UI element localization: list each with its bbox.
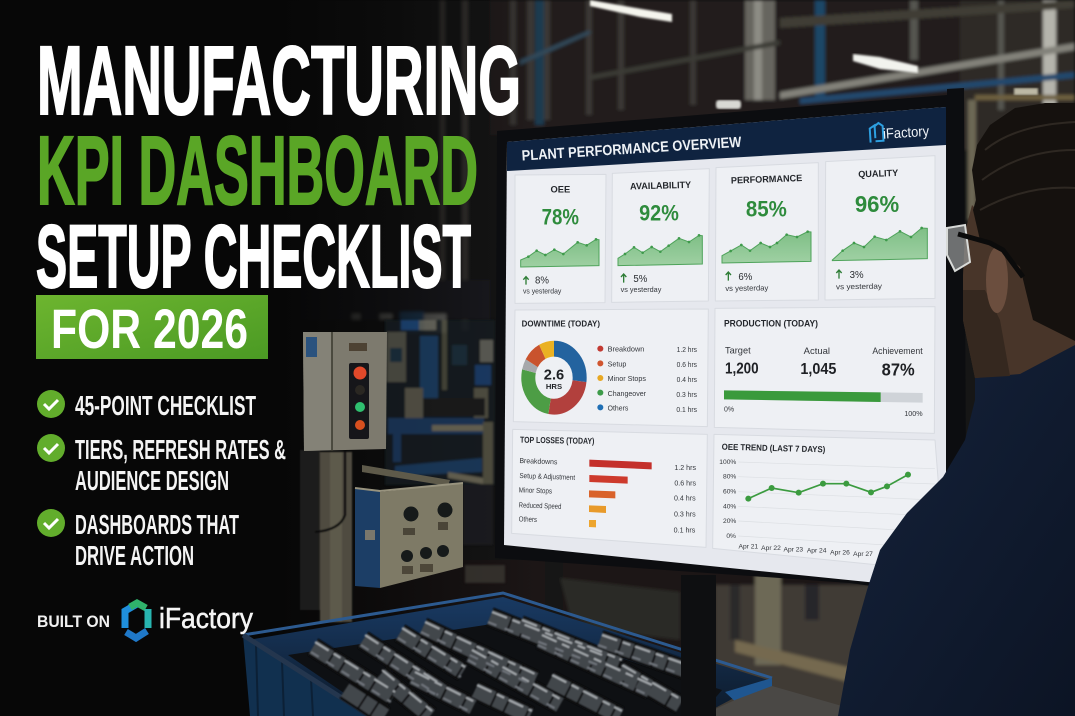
item: dashboards bbox=[37, 509, 239, 571]
loss rows: 0.1 hrs bbox=[674, 525, 696, 534]
card: performance: 6% bbox=[738, 272, 753, 283]
stack light: green bbox=[355, 402, 365, 412]
skin bbox=[963, 205, 1075, 378]
card: OEE: 78% bbox=[542, 204, 579, 229]
shirt bbox=[838, 342, 1075, 716]
card: OEE: 8% bbox=[535, 276, 549, 287]
panel: OEE trend: 100% bbox=[719, 459, 736, 466]
donut legend: 0.3 hrs bbox=[676, 390, 697, 399]
stack light: red bbox=[354, 366, 366, 380]
panel: production: Target bbox=[725, 346, 751, 356]
item: tiers bbox=[37, 434, 286, 496]
lower background racks bbox=[300, 280, 490, 320]
loss rows: Minor Stops bbox=[519, 485, 553, 496]
panel: downtime: 2.6 bbox=[544, 367, 564, 383]
screen header bbox=[507, 107, 946, 171]
item: tiers: AUDIENCE DESIGN bbox=[75, 465, 229, 496]
card: quality bbox=[825, 156, 935, 300]
stack light: orange bbox=[355, 420, 365, 430]
screen bbox=[504, 107, 946, 590]
icon: iFactory hexagon logo bbox=[125, 603, 148, 638]
card: performance: vs yesterday bbox=[725, 283, 769, 293]
loss rows: Others bbox=[519, 514, 538, 524]
crate of camshafts bbox=[243, 593, 842, 716]
panel: OEE trend: 0% bbox=[726, 533, 736, 540]
monitor stand bbox=[681, 575, 716, 716]
control pillar bbox=[300, 450, 352, 622]
panel: production: PRODUCTION (TODAY) bbox=[724, 318, 818, 328]
panel: OEE trend: Apr 24 bbox=[807, 548, 827, 555]
panel: OEE trend: 60% bbox=[723, 489, 736, 496]
dashboard title: PLANT PERFORMANCE OVERVIEW bbox=[521, 135, 742, 164]
panel: production: 1,045 bbox=[800, 361, 837, 378]
panel: production: 87% bbox=[882, 360, 915, 380]
donut legend: Minor Stops bbox=[608, 374, 646, 383]
loss rows: 1.2 hrs bbox=[674, 463, 696, 472]
hair bbox=[972, 103, 1075, 341]
year badge: FOR 2026 bbox=[51, 297, 248, 360]
donut legend bbox=[597, 345, 697, 414]
ear bbox=[986, 247, 1008, 313]
card: OEE: OEE bbox=[550, 185, 570, 195]
card: quality: 3% bbox=[850, 270, 864, 281]
stone slab bbox=[700, 686, 842, 716]
panel: top losses bbox=[512, 429, 707, 547]
donut legend: 0.4 hrs bbox=[677, 375, 697, 384]
donut legend: Others bbox=[608, 404, 628, 413]
ifactory screen logo: iFactory bbox=[883, 124, 930, 143]
donut legend: Breakdown bbox=[608, 345, 644, 354]
panel: OEE trend: 20% bbox=[723, 518, 736, 525]
panel: OEE trend bbox=[713, 434, 945, 572]
stack light: off bbox=[355, 385, 365, 395]
title bbox=[36, 26, 521, 306]
item: tiers: TIERS, REFRESH RATES & bbox=[75, 434, 286, 465]
card: availability: vs yesterday bbox=[621, 285, 661, 294]
loss rows: Breakdowns bbox=[519, 456, 558, 466]
built on iFactory: iFactory bbox=[159, 603, 253, 635]
electrical box with knobs bbox=[355, 465, 463, 588]
checklist bbox=[37, 390, 286, 571]
panel: downtime: HRS bbox=[546, 382, 562, 391]
ceiling lights bbox=[590, 0, 1038, 109]
panel: top losses: TOP LOSSES (TODAY) bbox=[520, 435, 595, 446]
production progress bar bbox=[724, 390, 923, 403]
card: performance: 85% bbox=[746, 197, 787, 222]
card: availability: 92% bbox=[639, 201, 679, 226]
panel: production: 100% bbox=[904, 411, 923, 418]
panel: downtime: DOWNTIME (TODAY) bbox=[522, 319, 600, 329]
title line 2: KPI DASHBOARD bbox=[37, 116, 478, 225]
built on iFactory bbox=[37, 603, 253, 638]
ifactory screen logo bbox=[869, 120, 930, 144]
built on iFactory: BUILT ON bbox=[37, 612, 110, 631]
panel: OEE trend: OEE TREND (LAST 7 DAYS) bbox=[722, 442, 826, 454]
item: 45-point checklist bbox=[37, 390, 256, 421]
monitor bbox=[495, 88, 966, 590]
card: OEE bbox=[515, 174, 606, 303]
donut legend: 0.1 hrs bbox=[676, 405, 697, 414]
card: OEE: vs yesterday bbox=[523, 287, 561, 296]
loss rows: 0.4 hrs bbox=[674, 494, 696, 503]
pipes bbox=[780, 43, 1075, 99]
panel: production: Achievement bbox=[872, 346, 923, 356]
panel: downtime bbox=[513, 309, 708, 427]
panel: production: 0% bbox=[724, 407, 734, 414]
panel: OEE trend: 80% bbox=[723, 474, 736, 481]
donut legend: Setup bbox=[608, 359, 626, 368]
panel: OEE trend: Apr 26 bbox=[830, 550, 850, 557]
item: dashboards: DASHBOARDS THAT bbox=[75, 509, 239, 540]
card: availability: 5% bbox=[633, 274, 648, 285]
panel: OEE trend: 40% bbox=[723, 503, 736, 510]
panel: production bbox=[714, 307, 935, 433]
card: quality: QUALITY bbox=[858, 168, 899, 179]
person viewing dashboard bbox=[838, 103, 1075, 716]
donut chart bbox=[519, 338, 589, 417]
panel: OEE trend: Apr 21 bbox=[739, 543, 758, 550]
monitor bezel bbox=[495, 88, 966, 590]
donut legend: 0.6 hrs bbox=[677, 360, 697, 369]
item: 45-point checklist: 45-POINT CHECKLIST bbox=[75, 390, 256, 421]
title line 1: MANUFACTURING bbox=[37, 26, 521, 135]
panel: production: Actual bbox=[804, 346, 830, 356]
vertical columns bbox=[440, 0, 696, 330]
card: availability: AVAILABILITY bbox=[630, 180, 692, 191]
camshafts bbox=[311, 612, 702, 716]
panel: OEE trend: Apr 23 bbox=[784, 546, 803, 553]
panel: OEE trend: Apr 22 bbox=[761, 545, 781, 552]
item: dashboards: DRIVE ACTION bbox=[75, 540, 194, 571]
card: performance: PERFORMANCE bbox=[731, 173, 802, 186]
loss rows: Reduced Speed bbox=[519, 500, 562, 511]
card: performance bbox=[715, 163, 818, 301]
card: quality: 96% bbox=[855, 191, 899, 217]
panel: OEE trend: Apr 27 bbox=[853, 551, 873, 558]
panel: production: 1,200 bbox=[725, 360, 759, 377]
glasses bbox=[947, 225, 1023, 277]
loss rows: Setup & Adjustment bbox=[519, 471, 575, 482]
OEE trend line bbox=[745, 472, 911, 502]
KPI cards and panels in zoomed coordinates bbox=[515, 156, 935, 303]
title line 3: SETUP CHECKLIST bbox=[36, 206, 471, 306]
control box with stack lights bbox=[303, 332, 387, 451]
card: availability bbox=[612, 169, 709, 302]
factory machinery behind the monitor bbox=[385, 320, 505, 583]
loss rows bbox=[519, 456, 696, 534]
donut legend: 1.2 hrs bbox=[677, 345, 697, 354]
loss rows: 0.3 hrs bbox=[674, 510, 696, 519]
card: quality: vs yesterday bbox=[836, 282, 882, 291]
donut legend: Changeover bbox=[608, 389, 646, 398]
loss rows: 0.6 hrs bbox=[674, 478, 696, 487]
